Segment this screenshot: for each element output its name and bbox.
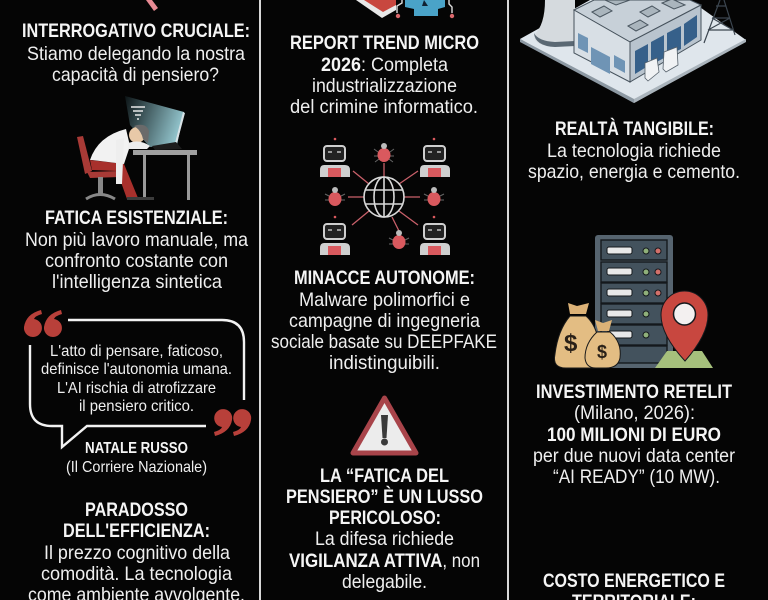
- heading: costo energetico e territoriale: [543, 570, 725, 600]
- text: paradosso body: comodità. La tecnologia: [41, 563, 232, 585]
- panel: centre column: [271, 0, 497, 593]
- text: quote attribution: NATALE RUSSO: [85, 440, 188, 457]
- text: fatica del pensiero body: delegabile.: [342, 571, 427, 593]
- text: interrogativo body: capacità di pensiero?: [52, 64, 219, 86]
- heading: fatica del pensiero: LA “FATICA DEL: [320, 465, 449, 487]
- text: quote: definisce l'autonomia umana.: [41, 361, 232, 378]
- text: minacce body: campagne di ingegneria: [289, 310, 480, 332]
- text: fatica del pensiero body: [289, 528, 480, 593]
- text: realtà body: spazio, energia e cemento.: [528, 161, 740, 183]
- icon: warning triangle: [353, 398, 416, 453]
- text: quote: L'AI rischia di atrofizzare: [57, 380, 216, 397]
- text: fatica body: [25, 229, 248, 293]
- text: report body: [290, 75, 478, 118]
- heading: report trend micro: REPORT TREND MICRO: [290, 32, 479, 54]
- heading: paradosso dell'efficienza: PARADOSSO: [85, 499, 188, 521]
- text: quote attribution: (Il Corriere Nazionale): [66, 459, 207, 476]
- text: fatica del pensiero body: La difesa richiede: [315, 528, 454, 550]
- icon: isometric data center: [520, 0, 746, 103]
- icon: robots, bugs and globe network: [320, 138, 450, 255]
- icon: shield and digital skull: [356, 0, 454, 18]
- text: report body: industrializzazione: [312, 75, 457, 97]
- icon: server, money bags and map pin: [554, 235, 713, 368]
- text: investment body: “AI READY” (10 MW).: [553, 466, 720, 488]
- text: minacce body: Malware polimorfici e: [299, 289, 470, 311]
- text: minacce body: indistinguibili.: [329, 352, 440, 374]
- icon: top fragment: [146, 0, 158, 11]
- heading: fatica del pensiero: PENSIERO” È UN LUSSO: [286, 485, 483, 508]
- text: quote: [41, 343, 232, 415]
- text: paradosso body: Il prezzo cognitivo della: [44, 542, 230, 564]
- panel: right column: [520, 0, 746, 600]
- text: fatica body: Non più lavoro manuale, ma: [25, 229, 248, 251]
- text: quote: L'atto di pensare, faticoso,: [50, 343, 223, 360]
- text: paradosso body: [28, 542, 245, 600]
- text: fatica body: l'intelligenza sintetica: [52, 271, 222, 293]
- panel: left column: [22, 0, 251, 600]
- heading: investimento retelit: (Milano, 2026):: [574, 402, 695, 424]
- heading: fatica del pensiero: [286, 465, 483, 529]
- text: quote attribution: [66, 440, 207, 476]
- heading: costo energetico e territoriale: COSTO ENERGETICO E: [543, 570, 725, 592]
- text: minacce body: [271, 289, 497, 374]
- icon: exhausted worker at desk: [77, 96, 197, 200]
- text: quote: il pensiero critico.: [79, 398, 194, 415]
- icon: server, money bags and map pin: $: [597, 342, 607, 362]
- text: interrogativo body: [27, 43, 245, 86]
- heading: paradosso dell'efficienza: [63, 499, 210, 542]
- callout: quote bubble: [24, 310, 251, 447]
- heading: fatica del pensiero: PERICOLOSO:: [329, 507, 441, 529]
- heading: realtà tangibile: REALTÀ TANGIBILE:: [555, 117, 714, 140]
- heading: minacce autonome: MINACCE AUTONOME:: [294, 267, 475, 289]
- icon: closing quote mark: [214, 409, 251, 436]
- text: fatica body: confronto costante con: [45, 250, 228, 272]
- text: realtà body: La tecnologia richiede: [547, 140, 721, 162]
- heading: investimento retelit: [536, 381, 732, 424]
- heading: interrogativo cruciale: INTERROGATIVO CRUCIALE:: [22, 20, 250, 42]
- heading: report trend micro: 2026: Completa: [321, 54, 448, 76]
- text: interrogativo body: Stiamo delegando la nostra: [27, 43, 245, 65]
- heading: fatica esistenziale: FATICA ESISTENZIALE:: [45, 207, 228, 229]
- heading: report trend micro: [290, 32, 479, 76]
- text: investment body: per due nuovi data center: [533, 445, 735, 467]
- heading: investimento retelit: INVESTIMENTO RETELIT: [536, 381, 732, 403]
- text: minacce body: sociale basate su DEEPFAKE: [271, 331, 497, 353]
- text: fatica del pensiero body: VIGILANZA ATTIVA, non: [289, 550, 480, 572]
- text: investment amount: 100 MILIONI DI EURO: [547, 424, 721, 446]
- text: investment body: [533, 445, 735, 488]
- icon: server, money bags and map pin: $: [564, 330, 578, 357]
- text: report body: del crimine informatico.: [290, 96, 478, 118]
- icon: opening quote mark: [24, 310, 62, 337]
- text: realtà body: [528, 140, 740, 183]
- heading: paradosso dell'efficienza: DELL'EFFICIENZA:: [63, 520, 210, 542]
